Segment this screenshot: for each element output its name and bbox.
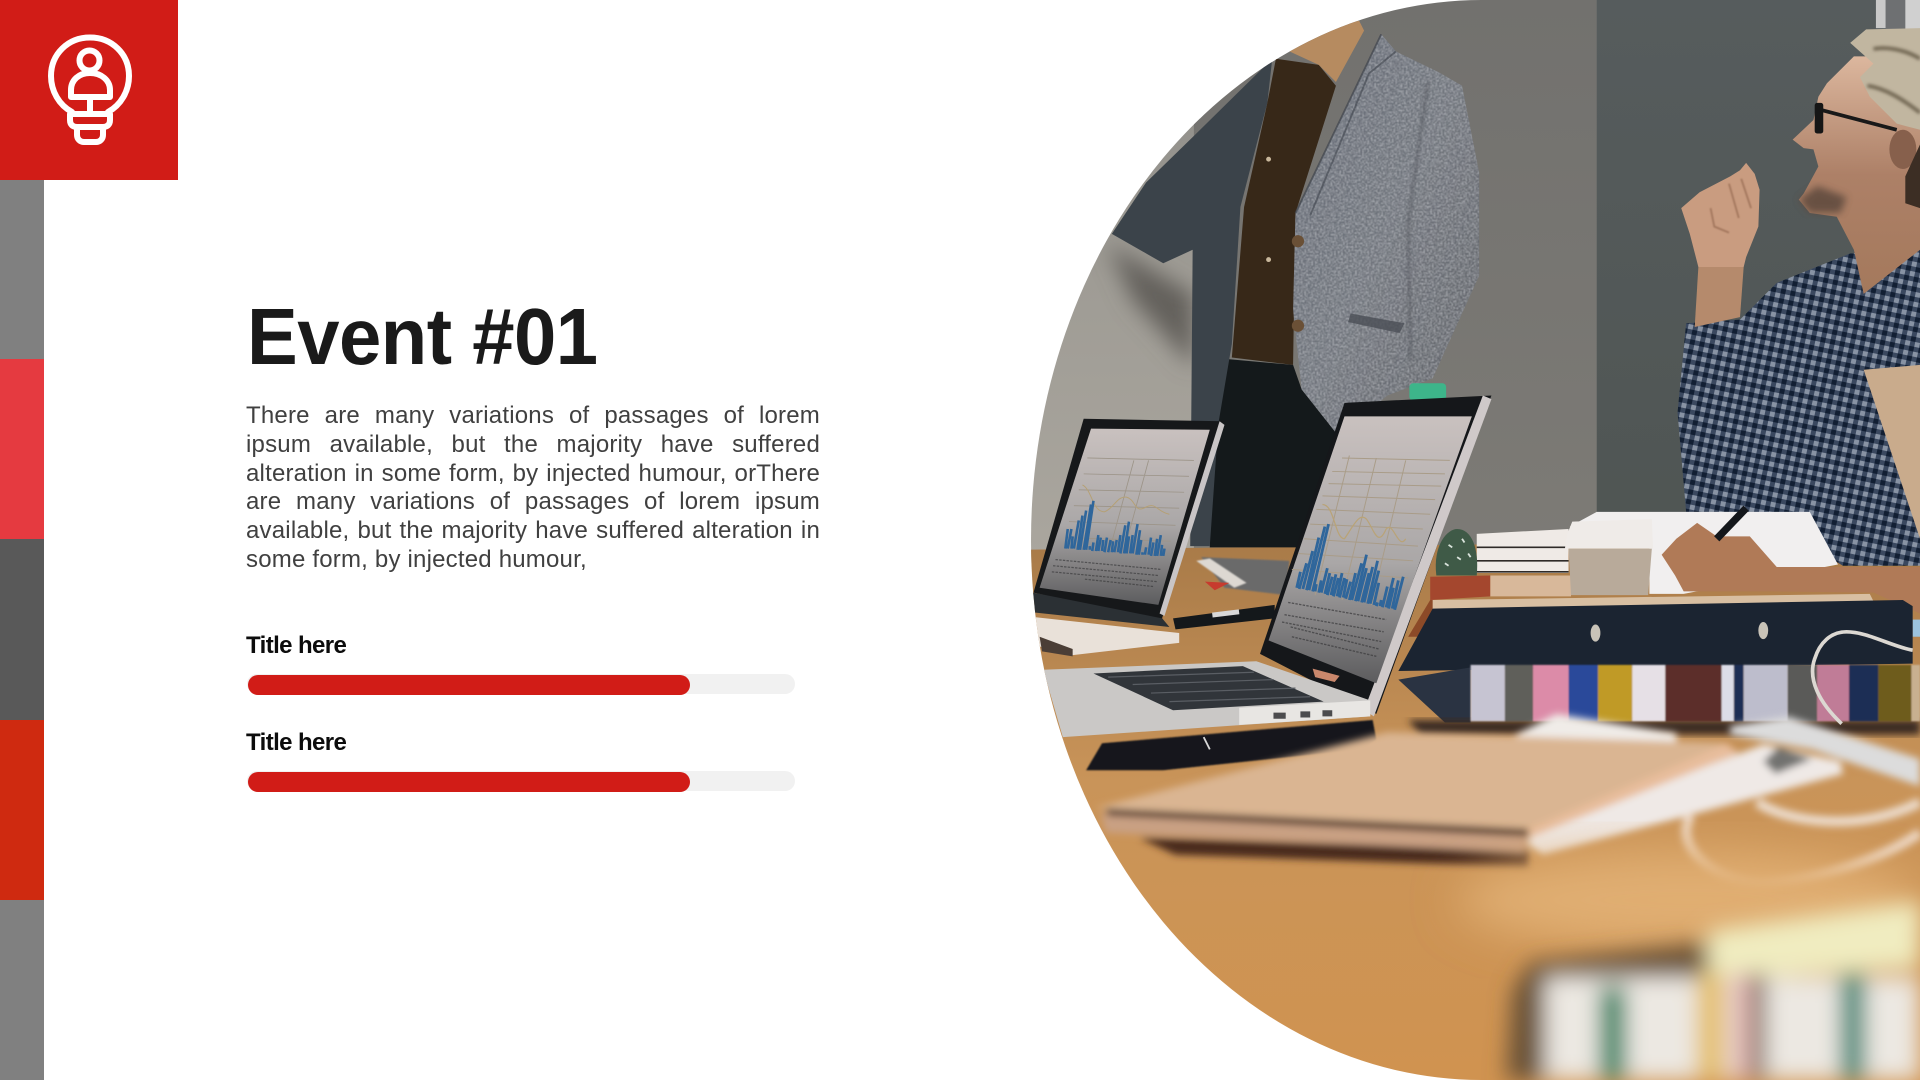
label: first progress title: Title here: [246, 632, 346, 659]
progress bar: first track: [247, 674, 795, 694]
photo: standing man: [1112, 21, 1479, 547]
photo: front laptop: [1043, 396, 1491, 770]
heading: Event #01: Event #01: [247, 292, 598, 381]
photo: green bottle: [1409, 383, 1446, 400]
text block: description: alteration in some form, by injected humour, orThere: [246, 460, 820, 487]
progress bar: second track: [247, 771, 795, 791]
photo: blurred notebook and cables: [1095, 714, 1920, 884]
icon: light bulb with person: [48, 34, 132, 145]
text block: description: available, but the majority have suffered alteration in: [246, 517, 820, 544]
photo: blurred foreground books: [1506, 901, 1920, 1080]
photo: seated man: [1678, 28, 1920, 566]
text block: description: There are many variations of passages of lorem: [246, 402, 820, 429]
photo: business meeting in rounded crop: [1031, 0, 1920, 1080]
photo: ring binder with striped spine: [1398, 594, 1920, 735]
photo: wooden table: [1016, 539, 1920, 1080]
label: second progress title: Title here: [246, 729, 346, 756]
photo: warm table highlight: [1457, 851, 1920, 949]
photo: small objects on table: [1035, 508, 1920, 656]
text block: description: are many variations of passages of lorem ipsum: [246, 488, 820, 515]
progress bar: first fill: [248, 675, 690, 695]
photo: office walls: [1016, 0, 1920, 563]
photo: tan laptop lid at right edge: [1864, 365, 1920, 539]
text block: description: some form, by injected humour,: [246, 546, 587, 573]
progress bar: second fill: [248, 772, 690, 792]
text block: description: [246, 402, 820, 573]
photo: back-left laptop: [1032, 419, 1224, 627]
panel: left colour strips: [0, 180, 44, 1080]
panel: red icon square: [0, 0, 178, 180]
text block: description: ipsum available, but the majority have suffered: [246, 431, 820, 458]
